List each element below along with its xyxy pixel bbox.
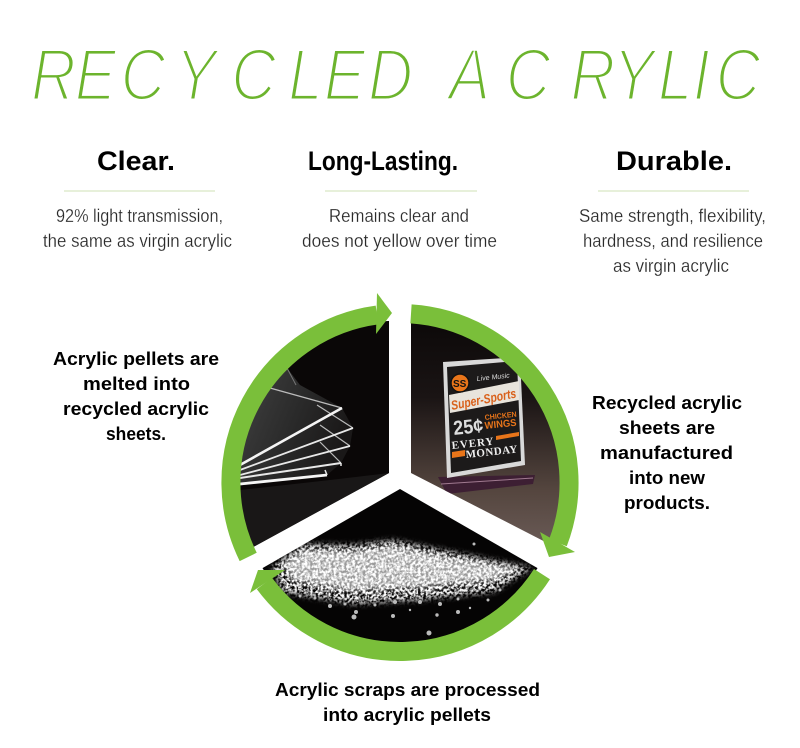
label: melted into sheets: melted into xyxy=(83,373,190,394)
sign frame and panel: Super-Sports xyxy=(450,386,517,413)
photo: acrylic sheets xyxy=(240,320,389,546)
label: manufactured into products: Recycled acrylic xyxy=(592,392,742,413)
text: durable description: hardness, and resilience xyxy=(583,231,763,251)
label: manufactured into products: into new xyxy=(629,467,706,488)
heading: long-lasting: Long-Lasting. xyxy=(308,146,458,176)
label: manufactured into products: sheets are xyxy=(619,417,715,438)
sign frame and panel xyxy=(443,357,525,478)
column: long-lasting xyxy=(302,146,497,251)
text: long-lasting description: does not yellow over time xyxy=(302,231,497,251)
label: melted into sheets xyxy=(53,348,219,444)
sign frame and panel: MONDAY xyxy=(465,444,518,461)
sign frame and panel: CHICKEN xyxy=(484,410,517,422)
heading: durable: Durable. xyxy=(616,146,732,176)
column: durable xyxy=(579,146,766,276)
sign frame and panel: EVERY xyxy=(451,436,494,452)
title: RECYCLED ACRYLIC xyxy=(31,35,761,116)
text: clear description xyxy=(43,206,232,251)
text: durable description: as virgin acrylic xyxy=(613,256,729,276)
sign base xyxy=(438,475,535,494)
text: clear description: 92% light transmission, xyxy=(56,206,223,226)
text: durable description: Same strength, flexibility, xyxy=(579,206,766,226)
arrow: left arc xyxy=(231,293,392,557)
column: clear xyxy=(43,146,232,251)
arrow: right arc xyxy=(411,314,575,557)
sign frame and panel: Live Music xyxy=(476,373,511,383)
text: durable description xyxy=(579,206,766,276)
recycling cycle diagram xyxy=(230,293,580,665)
label: melted into sheets: sheets. xyxy=(106,423,166,444)
label: manufactured into products: manufactured xyxy=(600,442,733,463)
label: scraps processed into pellets: into acrylic pellets xyxy=(323,704,491,725)
label: manufactured into products xyxy=(592,392,742,513)
label: scraps processed into pellets: Acrylic scraps are processed xyxy=(275,679,540,700)
heading: clear: Clear. xyxy=(97,146,175,176)
arrow: bottom arc xyxy=(250,570,542,652)
sign frame and panel: SS xyxy=(453,379,467,390)
sign frame and panel: WINGS xyxy=(484,418,517,432)
label: melted into sheets: recycled acrylic xyxy=(63,398,209,419)
label: melted into sheets: Acrylic pellets are xyxy=(53,348,219,369)
text: long-lasting description: Remains clear and xyxy=(329,206,469,226)
photo: acrylic sign product xyxy=(411,323,560,541)
text: long-lasting description xyxy=(302,206,497,251)
label: scraps processed into pellets xyxy=(275,679,540,725)
label: manufactured into products: products. xyxy=(624,492,710,513)
sign frame and panel: 25¢ xyxy=(452,415,484,440)
text: clear description: the same as virgin acrylic xyxy=(43,231,232,251)
photo: acrylic pellets xyxy=(262,489,538,642)
